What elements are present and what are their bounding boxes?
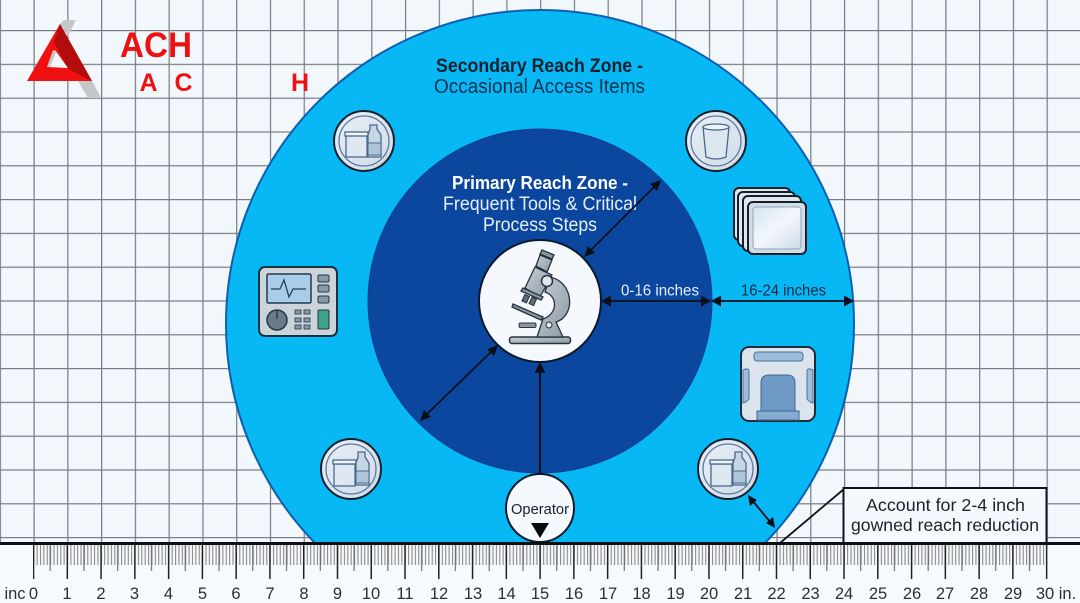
ruler labels: 24 — [835, 585, 853, 603]
icon: stacked trays — [734, 188, 806, 254]
ruler labels: 15 — [531, 585, 549, 603]
ruler labels: 7 — [265, 585, 275, 603]
ruler labels: 19 — [666, 585, 685, 603]
ruler labels: 2 — [96, 585, 106, 603]
ruler labels: 22 — [767, 585, 786, 603]
operator marker: Operator — [511, 501, 569, 518]
icon: containers bottom left — [321, 439, 381, 499]
ruler labels: 5 — [198, 585, 207, 603]
icon: containers top left — [334, 111, 394, 171]
ruler labels: 25 — [869, 585, 887, 603]
secondary zone heading — [434, 56, 645, 98]
ruler labels: 20 — [700, 585, 718, 603]
primary zone heading: Frequent Tools & Critical — [443, 194, 637, 215]
logo: H — [291, 69, 309, 97]
ruler labels: 0 — [29, 585, 38, 603]
arrow: operator to microscope — [534, 362, 546, 474]
secondary zone heading: Secondary Reach Zone - — [436, 56, 643, 77]
ruler labels: 30 in. — [1036, 585, 1076, 603]
ruler labels: 16 — [565, 585, 583, 603]
ruler labels: 29 — [1004, 585, 1022, 603]
ruler labels: 4 — [164, 585, 173, 603]
icon: containers bottom right — [698, 439, 758, 499]
ruler labels: 27 — [936, 585, 954, 603]
ruler labels: 18 — [632, 585, 651, 603]
ruler labels: 8 — [299, 585, 309, 603]
label: 16-24 inches: 16-24 inches — [741, 282, 826, 300]
ruler labels: 9 — [333, 585, 342, 603]
callout: gowned reach reduction: Account for 2-4 inch — [866, 495, 1025, 515]
icon: glove port panel — [741, 347, 815, 421]
ruler labels: 14 — [497, 585, 516, 603]
secondary zone heading: Occasional Access Items — [434, 76, 645, 98]
icon: cup top right — [686, 111, 746, 171]
ruler labels: 26 — [903, 585, 921, 603]
ruler labels: 1 — [62, 585, 72, 603]
arrow: 0-16 inches — [601, 296, 711, 306]
logo: ACH — [120, 26, 192, 65]
ruler labels: 17 — [599, 585, 617, 603]
logo — [27, 20, 309, 98]
ruler labels: inc — [4, 585, 26, 603]
label: 0-16 inches: 0-16 inches — [621, 282, 699, 300]
primary zone heading: Process Steps — [483, 215, 597, 236]
arrow: gowned reach gap — [748, 495, 775, 528]
icon: monitor device — [259, 267, 337, 336]
ruler labels: 11 — [396, 585, 414, 603]
primary zone heading: Primary Reach Zone - — [452, 172, 628, 193]
ruler labels: 6 — [231, 585, 241, 603]
ruler labels: 13 — [464, 585, 482, 603]
icon: microscope — [479, 240, 601, 362]
ruler labels: 21 — [734, 585, 752, 603]
ruler labels: 23 — [801, 585, 820, 603]
callout: gowned reach reduction — [780, 488, 1046, 543]
arrow: upper diagonal 0-16 reach — [584, 180, 661, 257]
logo: C — [174, 69, 193, 97]
primary zone heading — [443, 172, 637, 236]
panel: primary reach zone — [368, 129, 712, 473]
ruler labels: 3 — [130, 585, 139, 603]
ruler labels — [4, 585, 1076, 603]
callout: gowned reach reduction: gowned reach reduction — [851, 515, 1039, 535]
ruler — [0, 542, 1080, 603]
arrow: 16-24 inches — [711, 296, 854, 306]
operator marker — [506, 474, 574, 542]
ruler labels: 28 — [970, 585, 988, 603]
panel: secondary reach zone — [226, 10, 854, 543]
ruler labels: 12 — [430, 585, 448, 603]
ruler labels: 10 — [362, 585, 380, 603]
arrow: lower diagonal 0-16 reach — [420, 345, 498, 421]
logo: A — [140, 69, 158, 97]
